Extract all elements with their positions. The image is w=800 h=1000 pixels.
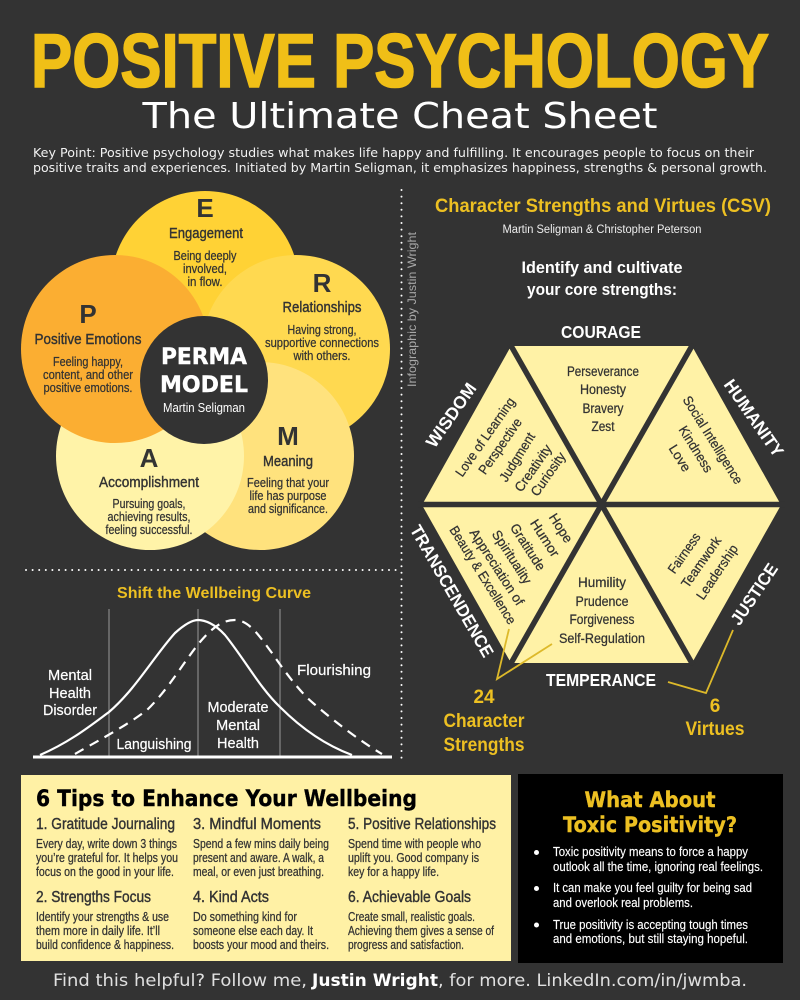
heading: toxic positivity: What About — [584, 788, 716, 812]
panel: wellbeing curve — [33, 585, 392, 757]
bullet 3 — [534, 918, 748, 946]
virtue labels: COURAGE — [561, 322, 641, 342]
text: relationships: Having strong, — [288, 323, 356, 337]
tip 3: Spend a few mins daily being — [193, 837, 329, 851]
virtue labels: TEMPERANCE — [546, 670, 656, 690]
key point text — [33, 146, 767, 175]
text: engagement: Being deeply — [174, 249, 237, 263]
tip 1: Every day, write down 3 things — [36, 837, 177, 851]
strengths: transcendence: Spirituality — [489, 527, 535, 587]
strengths: transcendence — [447, 511, 576, 627]
strengths: humanity: Social Intelligence — [680, 393, 746, 487]
strengths: justice — [665, 530, 741, 602]
text: accomplishment: Accomplishment — [99, 475, 199, 491]
chart: virtues hexagon — [418, 344, 785, 665]
tip 4: boosts your mood and theirs. — [193, 938, 329, 952]
label: moderate mental health: Mental — [216, 717, 260, 734]
panel: character strengths heading: Martin Seligman & Christopher Peterson — [502, 224, 702, 236]
text: meaning — [247, 421, 329, 516]
solid curve — [40, 620, 352, 755]
label: mental health disorder: Health — [49, 685, 91, 702]
tip 4: 4. Kind Acts — [193, 889, 269, 906]
tip 2: Identify your strengths & use — [36, 910, 169, 924]
tip 5: uplift you. Good company is — [348, 851, 479, 865]
callout: 24 character strengths: 24 — [474, 687, 495, 708]
tip 6: Achieving them gives a sense of — [348, 924, 494, 938]
text: accomplishment: achieving results, — [108, 510, 190, 524]
label: mental health disorder — [43, 667, 97, 719]
credit: infographic by: Infographic by Justin Wright — [405, 231, 419, 387]
text: accomplishment: feeling successful. — [106, 523, 192, 537]
heading: 6 tips: 6 Tips to Enhance Your Wellbeing — [36, 786, 417, 812]
strengths: temperance: Forgiveness — [570, 612, 635, 627]
tip 2: build confidence & happiness. — [36, 938, 174, 952]
heading: shift the wellbeing curve: Shift the Wellbeing Curve — [117, 585, 311, 602]
footer: Find this helpful? Follow me, — [53, 971, 307, 991]
strengths: wisdom: Perspective — [475, 415, 525, 477]
bullet 2: It can make you feel guilty for being sad — [553, 881, 752, 895]
tip 6: 6. Achievable Goals — [348, 889, 471, 906]
strengths: courage: Bravery — [582, 401, 624, 416]
strengths: wisdom: Love of Learning — [452, 395, 518, 480]
footer: , for more. LinkedIn.com/in/jwmba. — [438, 971, 747, 991]
tip 5: 5. Positive Relationships — [348, 816, 496, 833]
tip 1 — [36, 816, 178, 879]
dashed curve: shifted — [75, 620, 382, 754]
strengths: transcendence: Beauty & Excellence — [447, 523, 519, 627]
tip 4 — [193, 889, 329, 952]
tip 3: present and aware. A walk, a — [193, 851, 324, 865]
bullet 3: True positivity is accepting tough times — [553, 918, 748, 932]
bullet 2: and overlook real problems. — [553, 896, 693, 910]
text: PERMA model center — [160, 345, 248, 415]
tip 5 — [348, 816, 496, 879]
strengths: transcendence: Appreciation of — [467, 526, 527, 608]
bullet 1 — [534, 845, 763, 874]
tip 6 — [348, 889, 494, 952]
heading: toxic positivity — [563, 788, 737, 837]
tip 1: you’re grateful for. It helps you — [36, 851, 178, 865]
text: accomplishment: Pursuing goals, — [112, 497, 186, 511]
text: positive emotions: Feeling happy, — [53, 355, 123, 369]
text: meaning: Meaning — [263, 454, 313, 470]
strengths: transcendence: Gratitude — [507, 521, 549, 573]
callout: 6 virtues: Virtues — [686, 719, 744, 740]
tip 5: Spend time with people who — [348, 837, 481, 851]
text: accomplishment: A — [140, 443, 159, 473]
tip 3: meal, or even just breathing. — [193, 865, 324, 879]
text: engagement: E — [196, 193, 214, 223]
text: meaning: and significance. — [248, 502, 328, 516]
text: relationships — [265, 268, 379, 363]
tip 2: 2. Strengths Focus — [36, 889, 151, 906]
text: positive emotions: Positive Emotions — [34, 332, 142, 348]
text: positive emotions: content, and other — [43, 368, 133, 382]
circle: positive emotions — [21, 255, 209, 443]
subtitle: The Ultimate Cheat Sheet — [141, 96, 658, 137]
heading: toxic positivity: Toxic Positivity? — [563, 813, 737, 837]
tip 1: focus on the good in your life. — [36, 865, 174, 879]
text: engagement: involved, — [183, 262, 227, 276]
tip 1: 1. Gratitude Journaling — [36, 816, 175, 833]
panel: character strengths heading: your core strengths: — [527, 280, 677, 299]
text: meaning: life has purpose — [250, 489, 327, 503]
text: engagement — [169, 193, 243, 289]
tip 4: someone else each day. It — [193, 924, 313, 938]
bullet 1: outlook all the time, ignoring real feelings. — [553, 860, 763, 874]
panel: toxic positivity — [518, 774, 783, 963]
text: relationships: with others. — [293, 349, 350, 363]
text: relationships: supportive connections — [265, 336, 379, 350]
text: relationships: Relationships — [282, 300, 362, 316]
bullet 2 — [534, 881, 752, 910]
callout: 6 virtues — [686, 696, 744, 740]
circle: accomplishment — [56, 362, 244, 550]
strengths: wisdom: Judgment — [496, 430, 538, 484]
strengths: wisdom — [452, 395, 569, 499]
label: moderate mental health: Health — [217, 735, 259, 752]
tip 3 — [193, 816, 329, 879]
callout: 24 character strengths — [444, 687, 525, 756]
label: mental health disorder: Disorder — [43, 702, 97, 719]
arrow: 24 character strengths pointer — [497, 629, 552, 679]
label: mental health disorder: Mental — [48, 667, 92, 684]
virtue labels: TRANSCENDENCE — [406, 522, 498, 661]
strengths: justice: Teamwork — [678, 533, 724, 591]
bullet 3: and emotions, but still staying hopeful. — [553, 932, 748, 946]
text: positive emotions: positive emotions. — [44, 381, 132, 395]
virtue labels — [406, 322, 788, 690]
label: moderate mental health: Moderate — [208, 699, 268, 716]
circle: engagement — [111, 191, 299, 379]
arrow: 6 virtues pointer — [668, 630, 733, 693]
strengths: humanity: Kindness — [676, 423, 716, 475]
strengths: courage: Zest — [592, 419, 615, 434]
bullet 1: Toxic positivity means to force a happy — [553, 845, 749, 859]
tip 6: Create small, realistic goals. — [348, 910, 475, 924]
strengths: courage: Honesty — [580, 382, 626, 397]
strengths: temperance: Humility — [578, 575, 626, 590]
text: relationships: R — [313, 268, 332, 298]
circle: meaning — [166, 362, 354, 550]
text: engagement: Engagement — [169, 226, 243, 242]
key point text: Key Point: Positive psychology studies what makes life happy and fulfilling. It encourages people to focus on their — [33, 146, 754, 160]
circle: relationships — [202, 255, 390, 443]
strengths: courage — [567, 364, 639, 434]
text: PERMA model center: MODEL — [160, 373, 248, 398]
panel: 6 tips — [21, 775, 511, 961]
text: PERMA model center: PERMA — [161, 345, 247, 370]
virtue labels: HUMANITY — [720, 375, 788, 461]
callout: 6 virtues: 6 — [710, 696, 720, 717]
tip 5: key for a happy life. — [348, 865, 439, 879]
center circle — [140, 316, 268, 444]
strengths: temperance: Self-Regulation — [559, 631, 645, 646]
strengths: transcendence: Hope — [546, 511, 576, 546]
strengths: wisdom: Curiosity — [528, 449, 569, 499]
footer — [53, 971, 747, 991]
strengths: temperance — [559, 575, 645, 646]
text: accomplishment — [99, 443, 199, 537]
label: moderate mental health — [208, 699, 268, 752]
panel: character strengths heading — [435, 196, 771, 299]
strengths: courage: Perseverance — [567, 364, 639, 379]
tip 4: Do something kind for — [193, 910, 297, 924]
panel: PERMA model — [21, 191, 390, 550]
footer: Justin Wright — [311, 971, 438, 991]
tip 2: them more in daily life. It’ll — [36, 924, 160, 938]
label: flourishing: Flourishing — [297, 662, 371, 679]
strengths: wisdom: Creativity — [512, 442, 555, 495]
strengths: transcendence: Humor — [527, 516, 563, 560]
tip 6: progress and satisfaction. — [348, 938, 464, 952]
axis — [33, 756, 392, 758]
text: PERMA model center: Martin Seligman — [163, 401, 245, 415]
callout: 24 character strengths: Strengths — [444, 735, 524, 756]
tip 3: 3. Mindful Moments — [193, 816, 321, 833]
text: meaning: M — [277, 421, 299, 451]
strengths: justice: Leadership — [693, 542, 741, 602]
panel: character strengths heading: Identify and cultivate — [522, 258, 682, 277]
panel: character strengths heading: Character Strengths and Virtues (CSV) — [435, 196, 771, 217]
strengths: humanity: Love — [666, 442, 694, 474]
strengths: temperance: Prudence — [576, 594, 628, 609]
text: positive emotions: P — [79, 299, 97, 329]
tip 2 — [36, 889, 174, 952]
label: languishing: Languishing — [116, 736, 192, 753]
callout: 24 character strengths: Character — [444, 711, 525, 732]
text: positive emotions — [34, 299, 142, 395]
virtue labels: JUSTICE — [726, 559, 782, 629]
key point text: positive traits and experiences. Initiated by Martin Seligman, it emphasizes happiness, strengths & personal growth. — [33, 161, 767, 175]
text: engagement: in flow. — [188, 275, 222, 289]
virtue labels: WISDOM — [422, 379, 481, 451]
text: meaning: Feeling that your — [247, 476, 329, 490]
strengths: justice: Fairness — [665, 530, 704, 576]
